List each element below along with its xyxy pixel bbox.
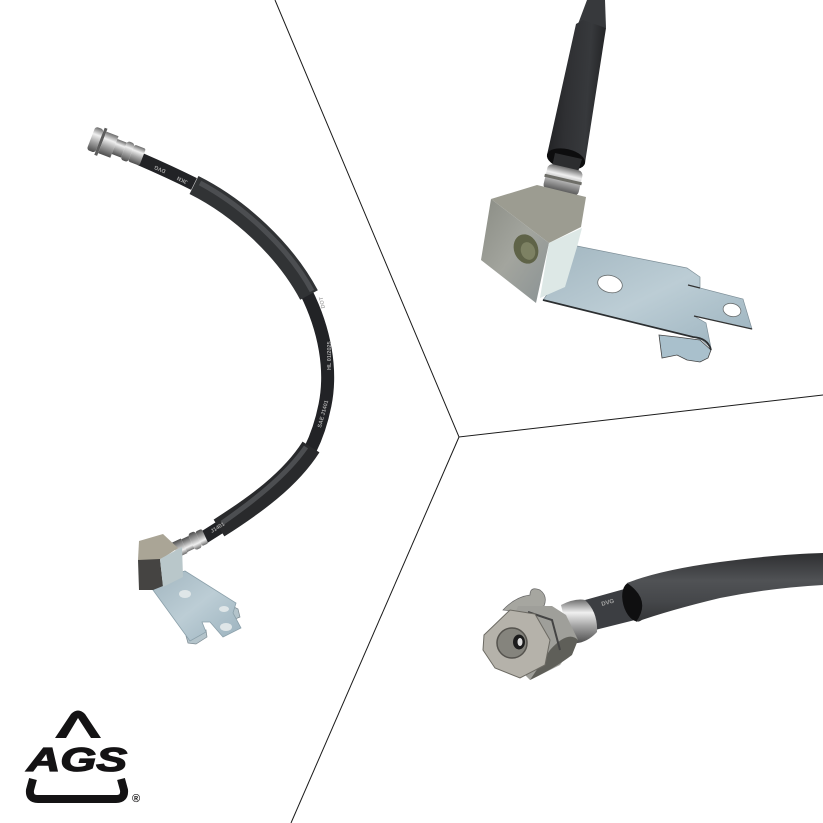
mounting plate	[153, 571, 241, 641]
hex nut face	[483, 610, 550, 678]
threaded bore	[497, 628, 527, 658]
hose markings: HL 01/2025	[327, 341, 333, 370]
hose close-up	[545, 0, 606, 173]
bracket plate	[543, 246, 752, 348]
panel dividers	[275, 0, 823, 823]
sleeve highlights	[200, 183, 312, 523]
lower end fitting	[171, 528, 209, 558]
plate lower edge	[543, 300, 711, 350]
hose markings: JKN	[176, 175, 189, 185]
thin hose	[585, 588, 635, 630]
hose markings: DOT	[319, 296, 327, 309]
bore opening	[513, 634, 525, 650]
hose markings: SAE J1401	[317, 400, 330, 429]
registered mark: ®	[132, 793, 140, 805]
mounting clips	[186, 603, 240, 644]
sleeve opening	[618, 580, 650, 624]
hose markings: DVG	[153, 164, 167, 174]
logo top chevron	[55, 710, 101, 738]
curled clip	[659, 335, 711, 362]
logo wordmark: AGS	[26, 741, 127, 778]
plate slot edges	[688, 285, 752, 329]
plate holes	[179, 590, 232, 631]
fitting body	[500, 606, 578, 680]
logo bottom bracket	[30, 779, 124, 799]
panel: bracket close-up	[481, 0, 752, 362]
panel: full brake hose	[86, 124, 333, 644]
thin hose sections	[140, 159, 328, 538]
crimp fitting	[542, 163, 584, 197]
steel block	[481, 185, 586, 303]
mounting block	[138, 534, 183, 590]
plate holes	[596, 273, 742, 318]
hose markings	[153, 164, 333, 535]
heat shrink sleeves	[194, 185, 311, 528]
crimp collar	[561, 600, 597, 643]
hook	[503, 589, 545, 612]
upper end fitting	[86, 124, 148, 171]
panel: fitting close-up	[483, 553, 823, 680]
hose markings: J1401	[210, 522, 226, 535]
logo: AGS	[26, 710, 140, 805]
sleeve	[627, 553, 823, 622]
hose marking: DVG	[601, 598, 615, 608]
